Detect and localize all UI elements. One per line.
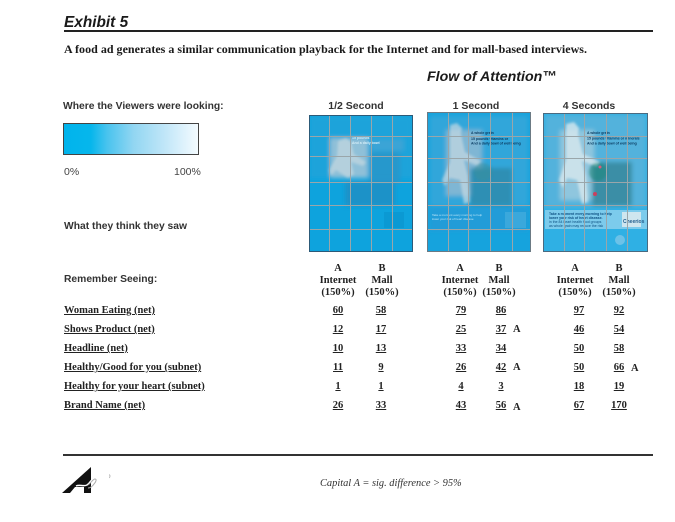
row: shows product: 17 <box>376 324 386 335</box>
row: headline <box>64 343 624 354</box>
heatmap: 4 seconds: Take a moment every morning to help <box>549 212 612 216</box>
row: healthy/good for you: 9 <box>378 362 384 373</box>
column headers: group 1 <box>320 263 399 298</box>
row: brand name: 56 <box>496 400 506 411</box>
heatmap: 1 second <box>427 112 531 252</box>
row: healthy/good for you: 26 <box>456 362 466 373</box>
column headers: group 3: Mall <box>608 275 630 286</box>
row: healthy for your heart: 18 <box>574 381 584 392</box>
column headers: group 3 <box>557 263 636 298</box>
row: headline: Headline (net) <box>64 343 128 354</box>
column headers: group 3: B <box>615 263 622 274</box>
column headers: group 3: (150%) <box>602 287 636 298</box>
row: headline: 34 <box>496 343 506 354</box>
title: Exhibit 5: Exhibit 5 <box>64 14 128 31</box>
heatmap: 4 seconds: as whole grain may reduce the risk <box>549 224 603 228</box>
row: brand name: 33 <box>376 400 386 411</box>
heatmap: 1/2 second: And a daily bowl <box>352 141 380 145</box>
row: shows product: 25 <box>456 324 466 335</box>
row: woman eating: 60 <box>333 305 343 316</box>
heatmap: 4 seconds: A whole grain <box>587 131 610 135</box>
heatmap: 4 seconds: lower your risk of heart disease. <box>549 216 603 220</box>
row: headline: 58 <box>614 343 624 354</box>
column headers: group 2: (150%) <box>482 287 516 298</box>
row: shows product: Shows Product (net) <box>64 324 155 335</box>
row: healthy/good for you: Healthy/Good for you (subnet) <box>64 362 201 373</box>
column headers: group 1: B <box>378 263 386 274</box>
row: healthy for your heart: 4 <box>458 381 464 392</box>
row: healthy/good for you: 50 <box>574 362 584 373</box>
row: brand name: 26 <box>333 400 343 411</box>
row: headline: 33 <box>456 343 466 354</box>
icon: logo <box>62 467 110 493</box>
column headers: group 2: Internet <box>442 275 478 286</box>
row: brand name <box>64 400 627 413</box>
heatmap: 4 seconds: And a daily bowl of well being <box>587 142 637 146</box>
row: woman eating: 79 <box>456 305 466 316</box>
heatmap: 1 second: And a daily bowl of well being <box>471 142 521 146</box>
heatmap: 4 seconds: Cheerios <box>623 219 645 225</box>
column headers: group 2: B <box>495 263 502 274</box>
label: remember seeing: Remember Seeing: <box>64 274 157 285</box>
column headers: group 2: A <box>456 263 464 274</box>
row: shows product: 37 <box>496 324 506 335</box>
column headers: group 3: A <box>571 263 579 274</box>
row: shows product: 54 <box>614 324 624 335</box>
row: healthy for your heart: Healthy for your heart (subnet) <box>64 381 205 392</box>
row: healthy for your heart: 1 <box>335 381 341 392</box>
column headers: group 2: (150%) <box>443 287 477 298</box>
footnote: Capital A = sig. difference > 95% <box>320 478 462 489</box>
column title: 4 seconds: 4 Seconds <box>563 100 615 112</box>
legend label: 100%: 100% <box>174 166 201 178</box>
column headers: group 1: Mall <box>372 275 392 286</box>
heatmap: 1 second: 15 pounds vitamins or <box>471 137 509 141</box>
column headers: group 1: Internet <box>320 275 356 286</box>
column title: 1 second: 1 Second <box>453 100 499 112</box>
row: healthy/good for you <box>64 362 639 374</box>
subtitle: A food ad generates a similar communication playback for the Internet and for mall-based interviews. <box>64 42 587 56</box>
column headers: group 2: Mall <box>488 275 510 286</box>
row: healthy for your heart <box>64 381 624 392</box>
row: shows product: 46 <box>574 324 584 335</box>
heatmap: 4 seconds <box>543 113 648 252</box>
row: woman eating: 97 <box>574 305 584 316</box>
heatmap: 4 seconds: in the 84 heart health food groups <box>549 220 602 224</box>
row: healthy/good for you: A <box>631 363 639 374</box>
row: brand name: Brand Name (net) <box>64 400 145 411</box>
heading: Flow of Attention: Flow of Attention™ <box>427 69 556 85</box>
column headers: group 1: (150%) <box>365 287 399 298</box>
legend label: 0%: 0% <box>64 166 79 178</box>
row: brand name: 170 <box>611 400 627 411</box>
heatmap: 1/2 second: 15 pounds <box>352 136 370 140</box>
column headers: group 3: (150%) <box>558 287 592 298</box>
column headers: group 2 <box>442 263 516 298</box>
row: woman eating: 86 <box>496 305 506 316</box>
row: shows product <box>64 324 624 335</box>
heatmap: 1/2 second <box>309 115 413 252</box>
heatmap: 4 seconds: 15 pounds vitamins or minerals <box>587 136 640 140</box>
label: what they think they saw: What they think they saw <box>64 221 187 232</box>
row: healthy for your heart: 19 <box>614 381 624 392</box>
heatmap: 1 second: A whole grain <box>471 131 494 135</box>
row: brand name: A <box>513 402 521 413</box>
row: brand name: 43 <box>456 400 466 411</box>
column headers: group 1: A <box>334 263 342 274</box>
label: where the viewers were looking: Where the Viewers were looking: <box>63 101 224 112</box>
column title: 1/2 second: 1/2 Second <box>328 100 384 112</box>
row: shows product: A <box>513 324 521 335</box>
row: healthy/good for you: A <box>513 362 521 373</box>
row: headline: 50 <box>574 343 584 354</box>
heatmap: 1 second: Take a moment every morning to help <box>432 213 483 217</box>
row: headline: 10 <box>333 343 343 354</box>
row: woman eating <box>64 305 624 316</box>
row: woman eating: 92 <box>614 305 624 316</box>
row: healthy/good for you: 11 <box>333 362 343 373</box>
row: shows product: 12 <box>333 324 343 335</box>
row: healthy/good for you: 42 <box>496 362 506 373</box>
heatmap panels <box>309 112 648 252</box>
row: woman eating: 58 <box>376 305 386 316</box>
row: healthy/good for you: 66 <box>614 362 624 373</box>
row: headline: 13 <box>376 343 386 354</box>
column headers: group 3: Internet <box>557 275 593 286</box>
row: brand name: 67 <box>574 400 584 411</box>
row: healthy for your heart: 1 <box>378 381 384 392</box>
legend: gradient scale <box>63 123 199 155</box>
row: woman eating: Woman Eating (net) <box>64 305 155 316</box>
column headers: group 1: (150%) <box>321 287 355 298</box>
row: healthy for your heart: 3 <box>498 381 504 392</box>
heatmap: 1 second: lower your risk of heart disease <box>432 217 474 221</box>
